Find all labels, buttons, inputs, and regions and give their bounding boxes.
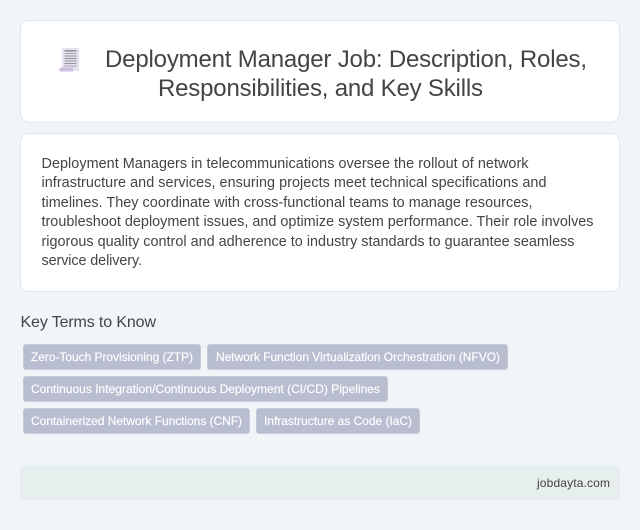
title bbox=[105, 46, 587, 102]
text block: description: timelines. They coordinate with cross-functional teams to manage resources, bbox=[42, 195, 532, 211]
tag: CI/CD: Continuous Integration/Continuous Deployment (CI/CD) Pipelines bbox=[31, 382, 380, 396]
tag: CI/CD bbox=[24, 376, 388, 402]
text block: description: troubleshoot deployment issues, and optimize system performance. Their role involves bbox=[42, 214, 594, 230]
tag: CNF bbox=[24, 408, 250, 434]
text block: description: Deployment Managers in telecommunications oversee the rollout of network bbox=[42, 156, 529, 172]
tag: IaC bbox=[256, 408, 420, 434]
icon: document scroll bbox=[59, 48, 79, 72]
text block: description: service delivery. bbox=[42, 253, 142, 269]
text block: description: rigorous quality control and adherence to industry standards to guarantee seamless bbox=[42, 234, 574, 250]
tag: NFVO: Network Function Virtualization Orchestration (NFVO) bbox=[216, 350, 500, 364]
footer bar bbox=[20, 466, 620, 500]
tag group: key terms bbox=[24, 344, 508, 434]
tag: ZTP: Zero-Touch Provisioning (ZTP) bbox=[31, 350, 193, 364]
tag: CNF: Containerized Network Functions (CNF) bbox=[31, 414, 242, 428]
footer bar: jobdayta.com bbox=[536, 476, 610, 490]
panel: title card bbox=[20, 20, 620, 122]
tag: NFVO bbox=[208, 344, 508, 370]
title: Deployment Manager Job: Description, Roles, bbox=[105, 46, 587, 73]
panel: description card bbox=[20, 134, 620, 292]
tag: IaC: Infrastructure as Code (IaC) bbox=[264, 414, 412, 428]
title: Responsibilities, and Key Skills bbox=[158, 75, 483, 102]
text block: description bbox=[42, 156, 594, 269]
heading: key terms: Key Terms to Know bbox=[20, 314, 156, 331]
text block: description: infrastructure and services, ensuring projects meet technical specifications and bbox=[42, 175, 546, 191]
tag: ZTP bbox=[24, 344, 200, 370]
